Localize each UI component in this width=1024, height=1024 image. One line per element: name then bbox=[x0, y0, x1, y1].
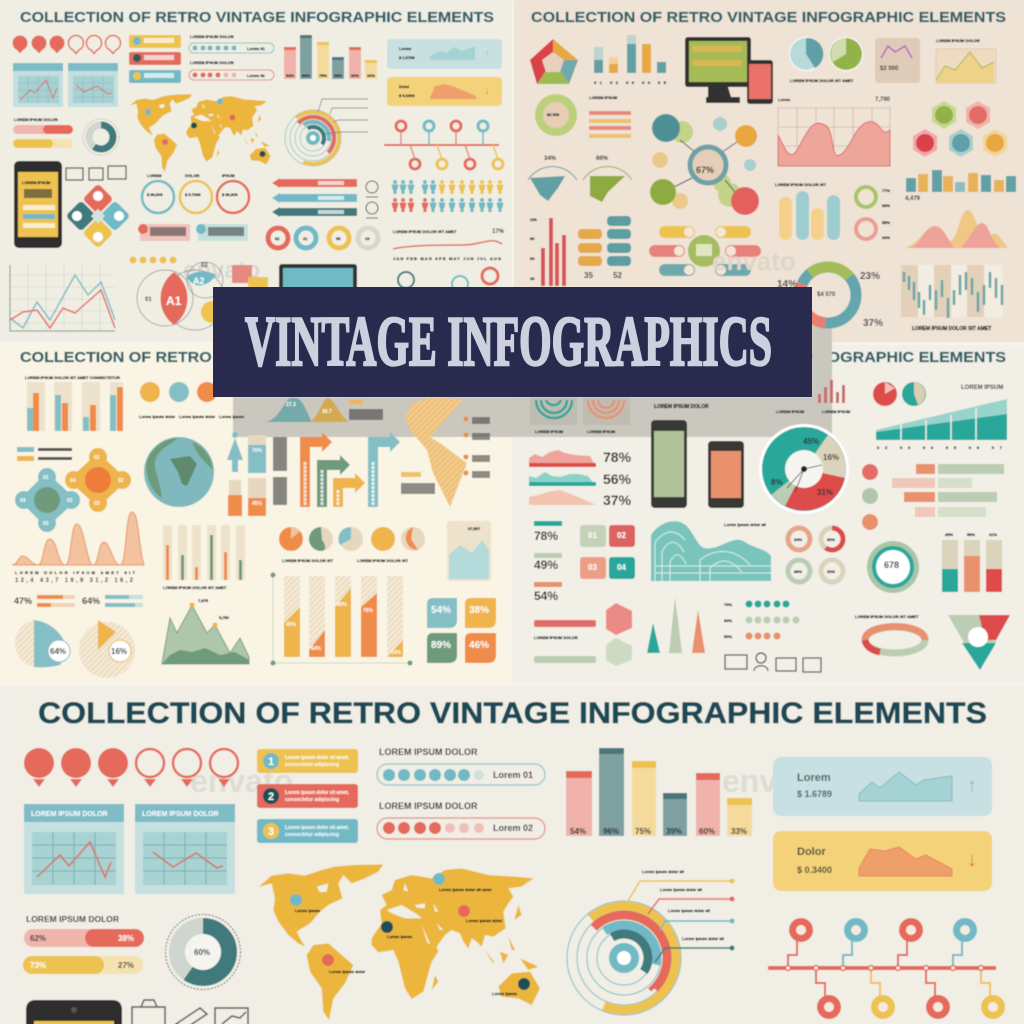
large line chart bbox=[10, 265, 115, 331]
flower teal: 04 bbox=[20, 498, 26, 504]
bar chart: 54% bbox=[286, 73, 294, 78]
stat cards bbox=[387, 39, 502, 106]
rating pills: LOREM IPSUM DOLOR bbox=[379, 747, 478, 757]
rating pills: Lorem 01 bbox=[493, 770, 533, 780]
percent tiles: 38% bbox=[469, 605, 489, 616]
bar chart: 39% bbox=[334, 73, 342, 78]
radial chart: Lorem ipsum dolor sit bbox=[642, 869, 685, 874]
big donut: 16% bbox=[823, 453, 839, 462]
diagonal bars: 45% bbox=[286, 622, 297, 628]
world map: Lorem ipsum dolor bbox=[329, 969, 366, 974]
progress bars bbox=[23, 914, 144, 974]
rating pills bbox=[189, 34, 274, 80]
progress bars: 38% bbox=[118, 934, 134, 943]
band mini bars: LOREM IPSUM bbox=[822, 409, 851, 414]
world map: Lorem ipsum bbox=[387, 934, 413, 939]
hub diagram bbox=[650, 114, 759, 215]
bar chart: 60% bbox=[699, 827, 715, 836]
flower teal: 03 bbox=[43, 521, 49, 527]
gear badge bbox=[535, 94, 577, 136]
heading: top-left: COLLECTION OF RETRO VINTAGE INFOGRAPHIC ELEMENTS bbox=[20, 9, 494, 26]
percent tiles bbox=[427, 598, 496, 663]
ring stats: LOREM bbox=[147, 173, 162, 178]
progress bars: 27% bbox=[118, 961, 134, 970]
venn diagram bbox=[130, 256, 225, 330]
percent tiles: 46% bbox=[469, 640, 489, 651]
panel: top-left collection bbox=[0, 0, 512, 342]
line trend: LOREM IPSUM DOLOR SIT AMET bbox=[393, 229, 457, 234]
radial chart: Lorem ipsum dolor sit bbox=[660, 887, 703, 892]
stacked cylinders bbox=[578, 216, 631, 280]
timeline small bbox=[384, 121, 503, 169]
donut chart: top-right bottom: 14% bbox=[777, 279, 797, 290]
text bars: LOREM IPSUM DOLOR bbox=[534, 635, 578, 640]
numbered list badges: 1 bbox=[268, 756, 274, 768]
people rows bbox=[392, 180, 503, 212]
diamond diagram bbox=[65, 183, 131, 249]
L arrows bbox=[305, 432, 400, 507]
colored lines list: LOREM IPSUM bbox=[589, 95, 618, 100]
heading: top-right: COLLECTION OF RETRO VINTAGE INFOGRAPHIC ELEMENTS bbox=[531, 9, 1006, 26]
red thin bars bbox=[530, 217, 566, 286]
pink area chart: Lorem bbox=[778, 97, 791, 102]
small dots column bbox=[862, 464, 878, 530]
upload bars: 45% bbox=[945, 532, 953, 537]
growth bars bbox=[876, 385, 1007, 450]
venn diagram: 01 bbox=[145, 297, 152, 303]
venn diagram: A1 bbox=[166, 294, 182, 308]
small donuts: 82 bbox=[275, 236, 280, 241]
pill bars bbox=[775, 182, 840, 240]
donut chart: top-right bottom: $4 570 bbox=[817, 292, 836, 298]
venn diagram: A2 bbox=[193, 276, 205, 286]
tag squares: 02 bbox=[617, 531, 626, 540]
band mini bars: LOREM IPSUM bbox=[776, 409, 805, 414]
growth bars: LOREM IPSUM bbox=[961, 385, 1003, 391]
progress bars: LOREM IPSUM DOLOR bbox=[26, 914, 119, 924]
phone: LOREM IPSUM bbox=[22, 180, 51, 185]
radial chart: Lorem ipsum dolor sit bbox=[682, 936, 725, 941]
mini card bbox=[447, 521, 491, 581]
donut chart: 60% bbox=[194, 948, 210, 957]
small ring charts bbox=[856, 187, 890, 240]
world map small bbox=[130, 94, 270, 172]
stacked cylinders: 52 bbox=[613, 271, 622, 280]
cubes bbox=[606, 603, 632, 666]
small donuts: 19 bbox=[365, 236, 370, 241]
upload bars bbox=[942, 532, 1002, 592]
tag notes bbox=[138, 224, 248, 241]
venn diagram: 02 bbox=[201, 263, 208, 269]
hexagons bbox=[913, 101, 1007, 157]
watermark bbox=[190, 763, 825, 799]
panel: mid-right collection bbox=[512, 345, 1024, 683]
bar chart: 39% bbox=[666, 827, 682, 836]
stat cards: ↑ bbox=[485, 48, 490, 58]
row of pies bbox=[279, 527, 425, 563]
bell peaks on band: 30.7 bbox=[322, 409, 332, 415]
bell chart bbox=[904, 210, 1008, 248]
bar chart: 96% bbox=[302, 73, 310, 78]
numbered list badges: Lorem ipsum dolor sit amet, bbox=[285, 825, 350, 831]
grouped bar chart bbox=[25, 375, 123, 431]
rating pills: Lorem 01 bbox=[247, 46, 266, 51]
mini line charts bbox=[13, 63, 118, 107]
pies: LOREM IPSUM DOLOR SIT AMET bbox=[790, 78, 854, 83]
ring stats: IPSUM bbox=[222, 173, 235, 178]
globes: 66% bbox=[596, 156, 609, 162]
line trend bbox=[393, 229, 505, 261]
bar chart: 60% bbox=[351, 73, 359, 78]
flower orange: 04 bbox=[70, 478, 76, 484]
stat card: Lorem: $ 1.6789 bbox=[797, 789, 832, 799]
diagonal bars: 14% bbox=[391, 650, 402, 656]
mini stacked bars bbox=[594, 35, 667, 85]
small progress bars bbox=[13, 117, 73, 148]
dot ratings: 60% bbox=[724, 618, 732, 623]
stat card: Lorem bbox=[773, 757, 992, 816]
spiral icons on band: LOREM IPSUM bbox=[535, 429, 564, 434]
stat cards: $ 1.6789 bbox=[399, 55, 415, 60]
diagonal bars bbox=[270, 572, 412, 666]
left stats: 49% bbox=[534, 558, 558, 572]
donut chart bbox=[166, 914, 240, 990]
diagonal bars: 89% bbox=[337, 602, 348, 608]
red thin bars: 40 bbox=[530, 276, 535, 281]
area rows: 56% bbox=[603, 471, 632, 487]
area rows: 37% bbox=[603, 492, 632, 508]
rating pills bbox=[377, 747, 545, 839]
watermark: envato bbox=[722, 763, 825, 799]
stat cards: Dolor bbox=[399, 84, 410, 89]
red thin bars: 60 bbox=[530, 256, 535, 261]
mountain chart: 7,075 bbox=[198, 598, 209, 603]
small ring charts: 88% bbox=[882, 203, 890, 208]
title banner bbox=[213, 287, 812, 397]
left stats bbox=[534, 521, 562, 603]
rating pills: LOREM IPSUM DOLOR bbox=[190, 60, 234, 65]
panel: top-right collection bbox=[514, 0, 1024, 342]
numbered badges bbox=[129, 35, 181, 83]
progress bars: 62% bbox=[30, 934, 46, 943]
toggle group bbox=[649, 226, 761, 276]
wave chart: Lorem ipsum dolor sit bbox=[724, 522, 767, 527]
globes bbox=[528, 156, 632, 202]
candlestick chart: LOREM IPSUM DOLOR SIT AMET bbox=[912, 326, 991, 332]
peak area chart: 12,4 43,7 19,9 31,2 16,2 bbox=[15, 578, 134, 584]
tag squares: 04 bbox=[617, 563, 626, 572]
mid-right contents bbox=[529, 380, 1010, 672]
diagonal bars: 64% bbox=[311, 646, 322, 652]
bar chart: 75% bbox=[319, 73, 327, 78]
outline icons bbox=[132, 1000, 248, 1024]
pink area chart: 7,790 bbox=[875, 97, 891, 103]
tag squares: 03 bbox=[588, 563, 597, 572]
left stats: 54% bbox=[534, 589, 558, 603]
gender figures: 76% bbox=[252, 448, 263, 454]
user icons bbox=[366, 181, 378, 218]
grey translucent band behind banner bbox=[233, 325, 832, 437]
heading: main bottom: COLLECTION OF RETRO VINTAGE INFOGRAPHIC ELEMENTS bbox=[38, 697, 987, 730]
pill bars: LOREM IPSUM DOLOR SIT bbox=[775, 182, 827, 187]
red thin bars: 80 bbox=[530, 236, 535, 241]
panel: bottom collection bbox=[0, 686, 1024, 1024]
ring stats bbox=[142, 173, 249, 213]
four donuts bbox=[788, 528, 843, 582]
upload bars: 56% bbox=[967, 532, 975, 537]
donut chart: top-right bottom bbox=[777, 256, 883, 334]
grouped bar chart: LOREM IPSUM DOLOR SIT AMET CONSECTETUR bbox=[25, 375, 120, 380]
donut chart: top-right bottom: 23% bbox=[860, 271, 880, 282]
monitor and phone bbox=[685, 37, 773, 104]
stacked mini bars: 4,479 bbox=[905, 196, 921, 202]
pentagon chart bbox=[530, 39, 578, 84]
stat cards: ↓ bbox=[485, 86, 490, 96]
mini progress: 64% bbox=[82, 596, 100, 606]
four donuts: 64% bbox=[794, 537, 802, 542]
striped americas map bbox=[405, 397, 467, 507]
red thin bars: 100 bbox=[530, 217, 537, 222]
four donuts: 96% bbox=[794, 569, 802, 574]
radial chart small bbox=[276, 99, 368, 175]
yellow area chart: LOREM IPSUM DOLOR bbox=[936, 38, 980, 43]
tag squares: 01 bbox=[588, 531, 597, 540]
circle pins: Lorem ipsum dolor bbox=[179, 414, 216, 419]
pie with callouts: 16% bbox=[111, 647, 127, 656]
band label: LOREM IPSUM DOLOR bbox=[654, 404, 709, 410]
gear score: 678 bbox=[884, 560, 899, 570]
stat card: Dolor: ↓ bbox=[967, 849, 977, 871]
outline icons bbox=[725, 653, 821, 672]
dot ratings: 50% bbox=[724, 634, 732, 639]
four donuts: 33% bbox=[827, 569, 835, 574]
big donut: 45% bbox=[803, 437, 819, 446]
location pins bbox=[24, 748, 238, 787]
small donuts: 58 bbox=[336, 236, 341, 241]
watermark: envato bbox=[190, 763, 293, 799]
circle pins bbox=[139, 382, 245, 419]
colored lines list bbox=[589, 95, 631, 138]
line chart cards bbox=[24, 804, 235, 894]
line trend: JAN FEB MAR APR MAY JUN JUL AUG bbox=[393, 256, 501, 261]
wave chart bbox=[651, 521, 771, 581]
bell peaks on band bbox=[265, 398, 383, 422]
peak area chart: LOREM DOLOR IPSUM AMET SIT bbox=[15, 570, 136, 575]
rating pills: Lorem 02 bbox=[247, 73, 266, 78]
ring chart bbox=[855, 614, 925, 653]
stacked cylinders: 35 bbox=[584, 271, 593, 280]
band mini bars bbox=[776, 380, 851, 414]
flower teal: 02 bbox=[67, 498, 73, 504]
mini stacked bars: 01 02 03 04 05 bbox=[594, 80, 667, 85]
bar chart bbox=[566, 748, 752, 836]
upload bars: 41% bbox=[989, 532, 997, 537]
folders and tablet bbox=[232, 264, 498, 292]
mini progress: 47% bbox=[14, 596, 32, 606]
watermark: envato bbox=[712, 246, 796, 276]
bar chart bbox=[284, 35, 377, 79]
progress bars: 73% bbox=[30, 961, 46, 970]
heading: mid-left: COLLECTION OF RETRO VINTAGE INFOGRAPHIC ELEMENTS bbox=[20, 349, 495, 366]
globe bbox=[144, 437, 214, 507]
phones bbox=[651, 420, 744, 508]
mountain chart bbox=[162, 598, 249, 664]
stacked mini bars bbox=[905, 170, 1016, 202]
rating pills: Lorem 02 bbox=[493, 823, 533, 833]
diverging bars bbox=[892, 464, 1004, 517]
flower orange bbox=[65, 448, 131, 512]
row of pies: LOREM IPSUM DOLOR SIT bbox=[282, 558, 334, 563]
flower orange: 01 bbox=[94, 455, 100, 461]
numbered list badges: consectetur adipiscing bbox=[285, 797, 339, 803]
stat cards: Lorem bbox=[399, 46, 412, 51]
big donut: 8% bbox=[771, 478, 783, 487]
growth bars: 02 03 04 05 06 07 bbox=[877, 445, 1003, 450]
line trend: 17% bbox=[492, 229, 505, 235]
bar chart: 96% bbox=[603, 827, 619, 836]
numbered list badges: 2 bbox=[268, 791, 274, 803]
left stats: 78% bbox=[534, 529, 558, 543]
dot ratings: 70% bbox=[724, 602, 732, 607]
triangle badge bbox=[948, 615, 1010, 670]
world map: Lorem ipsum bbox=[295, 908, 321, 913]
row of pies: LOREM IPSUM DOLOR SIT bbox=[357, 558, 409, 563]
pie with callouts bbox=[15, 620, 135, 678]
map legend bbox=[401, 416, 490, 494]
pies bbox=[789, 37, 863, 83]
small donuts: 41 bbox=[303, 236, 308, 241]
gear score bbox=[867, 541, 919, 593]
rating pills: LOREM IPSUM DOLOR bbox=[379, 801, 478, 811]
small ring charts: 55% bbox=[882, 220, 890, 225]
globes: 34% bbox=[544, 156, 557, 162]
stat card: Lorem: ↑ bbox=[967, 775, 977, 797]
icons row bbox=[66, 166, 126, 180]
line chart cards: LOREM IPSUM DOLOR bbox=[31, 811, 108, 818]
flower teal: 01 bbox=[43, 475, 49, 481]
text bars bbox=[534, 620, 596, 663]
gender figures: 45% bbox=[252, 501, 263, 507]
small ring charts: 33% bbox=[882, 235, 890, 240]
bar chart: 33% bbox=[367, 73, 375, 78]
donut chart: top-right bottom: 37% bbox=[863, 318, 883, 329]
big donut: 31% bbox=[817, 488, 833, 497]
gear badge: $2 000 bbox=[547, 112, 560, 117]
line chart cards: LOREM IPSUM DOLOR bbox=[142, 811, 219, 818]
stat card: Dolor bbox=[773, 831, 992, 891]
numbered list badges: Lorem ipsum dolor sit amet, bbox=[285, 790, 350, 796]
flower teal bbox=[15, 468, 80, 532]
world map: Lorem ipsum bbox=[492, 991, 518, 996]
purple line card: $2 000 bbox=[880, 66, 899, 72]
area rows: 78% bbox=[603, 449, 632, 465]
circle pins: Lorem ipsum dolor bbox=[139, 414, 176, 419]
watermark: envato bbox=[183, 257, 260, 284]
yellow area chart bbox=[936, 38, 996, 83]
four donuts: 60% bbox=[827, 537, 835, 542]
area rows bbox=[529, 449, 632, 508]
ring stats: DOLOR bbox=[185, 173, 200, 178]
bell peaks on band: 27.3 bbox=[286, 402, 296, 408]
tag squares bbox=[580, 525, 635, 579]
slim bars: LOREM IPSUM DOLOR SIT AMET bbox=[163, 585, 227, 590]
circle pins: Lorem ipsum bbox=[219, 414, 245, 419]
rating pills: LOREM IPSUM DOLOR bbox=[190, 34, 234, 39]
candlestick chart bbox=[901, 265, 1003, 332]
bar chart: 54% bbox=[570, 827, 586, 836]
stat cards: $ 0.3400 bbox=[399, 93, 415, 98]
mini progress bbox=[14, 595, 143, 607]
mid-left contents bbox=[12, 375, 496, 678]
stat card: Dolor: $ 0.3400 bbox=[797, 865, 832, 875]
small ring charts: 77% bbox=[882, 188, 890, 193]
hub diagram: 67% bbox=[696, 165, 714, 175]
legend bbox=[17, 447, 72, 461]
numbered list badges: 3 bbox=[268, 826, 274, 838]
panel: mid-left collection bbox=[0, 345, 510, 683]
cones bbox=[647, 597, 705, 653]
world map: Lorem ipsum dolor sit amet bbox=[439, 887, 492, 892]
big donut bbox=[759, 424, 849, 514]
ring stats: $ 00,000 bbox=[222, 192, 238, 197]
percent tiles: 54% bbox=[431, 605, 451, 616]
numbered list badges bbox=[257, 749, 358, 843]
percent tiles: 89% bbox=[431, 640, 451, 651]
radial chart: Lorem ipsum dolor sit bbox=[668, 908, 711, 913]
heading: mid-right: COLLECTION OF RETRO VINTAGE INFOGRAPHIC ELEMENTS bbox=[531, 349, 1006, 366]
numbered list badges: Lorem ipsum dolor sit amet, bbox=[285, 755, 350, 761]
flower orange: 02 bbox=[118, 478, 124, 484]
mini card: 67,567 bbox=[468, 526, 481, 531]
spiral icons on band: LOREM IPSUM bbox=[587, 429, 616, 434]
stat card: Dolor: Dolor bbox=[797, 846, 826, 858]
bar chart: 75% bbox=[635, 827, 651, 836]
purple line card bbox=[875, 38, 920, 83]
peak area chart bbox=[12, 512, 144, 584]
radial chart bbox=[551, 869, 734, 1024]
mountain chart: 5,750 bbox=[219, 615, 230, 620]
pie with callouts: 64% bbox=[50, 647, 66, 656]
small donuts bbox=[268, 228, 378, 248]
flower orange: 03 bbox=[94, 501, 100, 507]
bar chart: 33% bbox=[731, 827, 747, 836]
dot ratings bbox=[724, 600, 800, 640]
spiral icons on band bbox=[530, 397, 630, 434]
ring stats: $ 00,000 bbox=[147, 192, 163, 197]
small progress bars: LOREM IPSUM DOLOR bbox=[14, 117, 58, 122]
numbered list badges: consectetur adipiscing bbox=[285, 762, 339, 768]
gender figures bbox=[227, 432, 287, 516]
ring stats: $ 0.7389 bbox=[185, 192, 201, 197]
timeline bbox=[768, 918, 1005, 1019]
phone top bbox=[26, 1000, 122, 1024]
diagonal bars: 78% bbox=[363, 608, 374, 614]
world map: Lorem ipsum dolor bbox=[466, 918, 503, 923]
ring chart: LOREM IPSUM DOLOR SIT AMET bbox=[855, 614, 919, 619]
stat card: Lorem: Lorem bbox=[797, 772, 831, 784]
slim bars bbox=[163, 525, 245, 590]
numbered list badges: consectetur adipiscing bbox=[285, 832, 339, 838]
small donut bbox=[83, 119, 119, 155]
phone bbox=[14, 161, 62, 248]
arrows bbox=[272, 178, 357, 217]
location pins row bbox=[12, 36, 121, 54]
pink area chart bbox=[778, 97, 891, 166]
world map bbox=[259, 864, 540, 1020]
pies right bbox=[873, 382, 926, 406]
